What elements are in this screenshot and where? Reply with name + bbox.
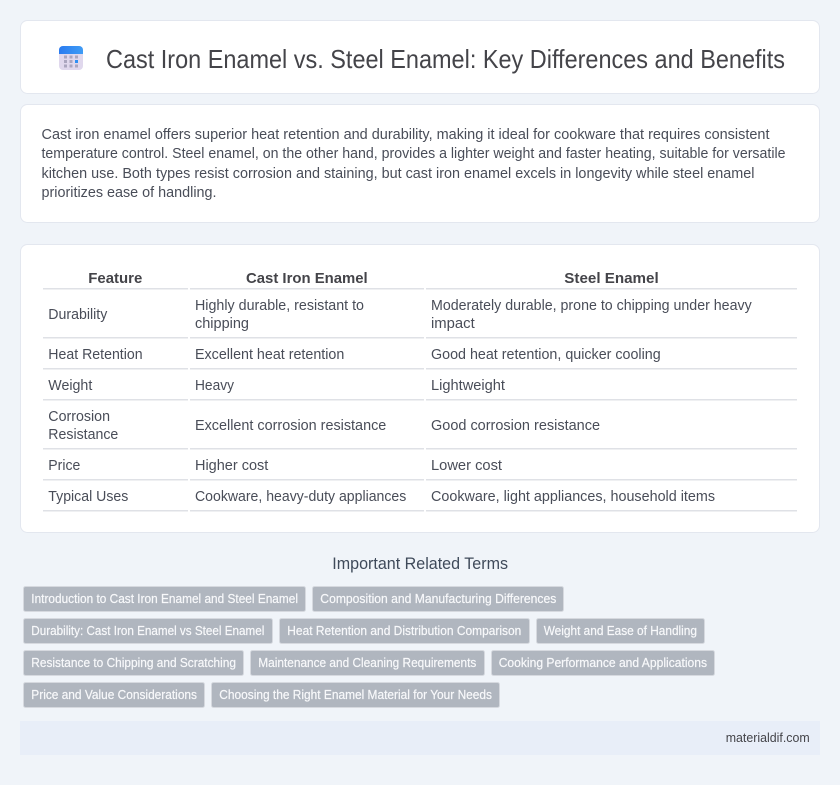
row: price: Lower cost (431, 458, 502, 474)
row: durability: Moderately durable, prone to chipping under heavy (431, 298, 752, 314)
related term chips: Weight and Ease of Handling (544, 624, 697, 638)
table header: Feature (88, 270, 142, 287)
row: heat retention (48, 347, 661, 363)
row: price: Higher cost (195, 458, 268, 474)
related term chips: Heat Retention and Distribution Comparison (287, 624, 521, 638)
panel: summary (20, 104, 820, 222)
related term chips: Durability: Cast Iron Enamel vs Steel Enamel (31, 624, 264, 638)
footer: materialdif.com (726, 731, 810, 745)
row: typical uses (48, 489, 715, 505)
row: weight: Heavy (195, 378, 235, 394)
row: durability: chipping (195, 316, 249, 332)
table header: Cast Iron Enamel (246, 270, 368, 287)
row: typical uses: Cookware, heavy-duty appliances (195, 489, 406, 505)
related term chips: Maintenance and Cleaning Requirements (258, 656, 476, 670)
row: corrosion resistance: Good corrosion resistance (431, 418, 600, 434)
related term chips: Choosing the Right Enamel Material for Your Needs (219, 688, 492, 702)
title: Cast Iron Enamel vs. Steel Enamel: Key Differences and Benefits (106, 46, 785, 74)
summary text: prioritizes ease of handling. (42, 185, 216, 201)
row: corrosion resistance: Corrosion (48, 409, 110, 425)
related term chips: Composition and Manufacturing Differences (320, 592, 556, 606)
related term chips: Price and Value Considerations (31, 688, 197, 702)
row: durability: Highly durable, resistant to (195, 298, 364, 314)
row: corrosion resistance (48, 409, 600, 443)
row: heat retention: Excellent heat retention (195, 347, 344, 363)
row: heat retention: Heat Retention (48, 347, 143, 363)
heading: related terms: Important Related Terms (332, 555, 508, 573)
row: corrosion resistance: Excellent corrosion resistance (195, 418, 386, 434)
related term chips: Cooking Performance and Applications (499, 656, 707, 670)
row: heat retention: Good heat retention, quicker cooling (431, 347, 661, 363)
row: weight: Lightweight (431, 378, 505, 394)
panel: comparison table (20, 244, 820, 532)
row: price (48, 458, 502, 474)
row: weight (48, 378, 505, 394)
row: durability (48, 298, 752, 332)
table header: Steel Enamel (564, 270, 659, 287)
summary text: Cast iron enamel offers superior heat retention and durability, making it ideal for cookware that requires consistent (42, 127, 770, 143)
footer (20, 721, 820, 755)
row: durability: Durability (48, 307, 108, 323)
summary text: kitchen use. Both types resist corrosion and staining, but cast iron enamel excels in longevity while steel enamel (42, 166, 754, 182)
row: corrosion resistance: Resistance (48, 427, 118, 443)
icon: calendar (59, 46, 83, 70)
related term chips: Introduction to Cast Iron Enamel and Steel Enamel (31, 592, 298, 606)
row: typical uses: Cookware, light appliances, household items (431, 489, 715, 505)
summary text: temperature control. Steel enamel, on the other hand, provides a lighter weight and faster heating, suitable for versatile (42, 146, 786, 162)
row: typical uses: Typical Uses (48, 489, 128, 505)
title panel (20, 20, 820, 94)
row: durability: impact (431, 316, 475, 332)
row: price: Price (48, 458, 80, 474)
summary text (42, 127, 786, 201)
related term chips (24, 586, 714, 708)
related term chips: Resistance to Chipping and Scratching (31, 656, 236, 670)
row: weight: Weight (48, 378, 92, 394)
table header (88, 270, 659, 287)
